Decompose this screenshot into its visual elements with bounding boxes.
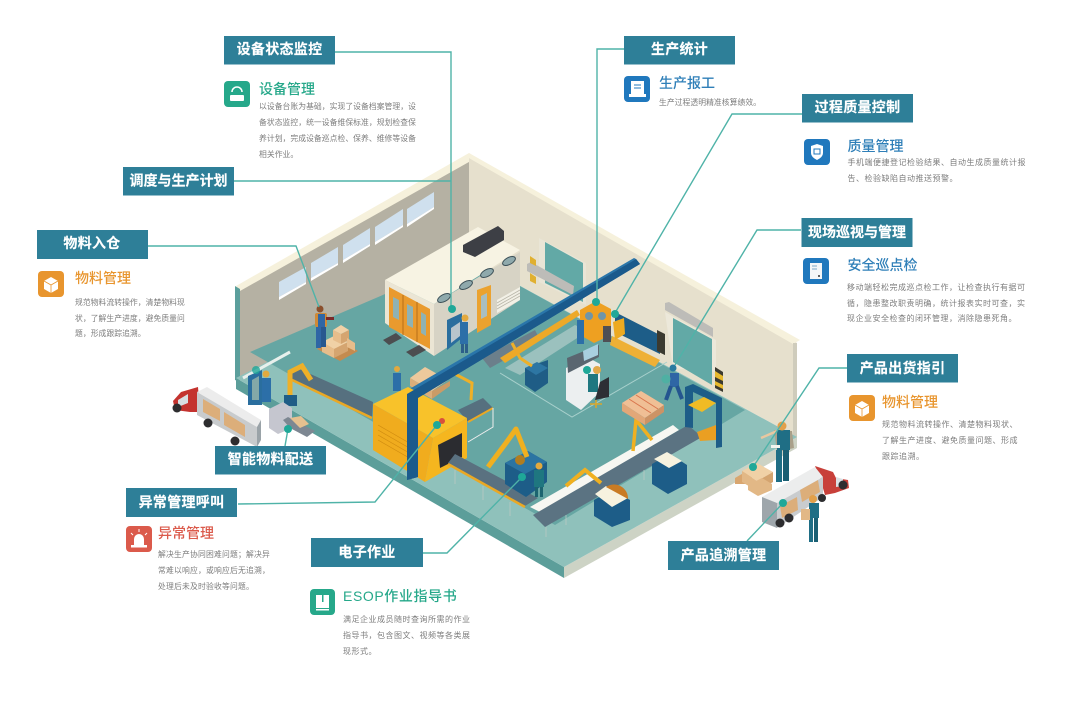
connector lines bbox=[148, 49, 847, 553]
icon: shield bbox=[804, 139, 830, 165]
heading: 产品追溯管理: 产品追溯管理 bbox=[681, 547, 766, 563]
illustration: isometric factory bbox=[172, 153, 849, 578]
truck: left bbox=[172, 387, 261, 447]
panel: 物料管理 left bbox=[38, 270, 185, 338]
material gate bbox=[269, 402, 315, 437]
heading: 过程质量控制 bbox=[802, 94, 913, 122]
heading: 生产统计 bbox=[624, 36, 735, 64]
title: 设备管理 bbox=[259, 81, 315, 97]
cartons behind gantry with worker bbox=[393, 366, 450, 399]
worker: truck loader bbox=[801, 495, 819, 542]
description: 解决生产协同困难问题；解决异 bbox=[158, 549, 270, 559]
description: 满足企业成员随时查询所需的作业 bbox=[343, 614, 470, 624]
worker: shipping supervisor bbox=[761, 422, 794, 482]
description: 处理后未及时验收等问题。 bbox=[158, 581, 254, 591]
description: 指导书，包含图文、视频等各类展 bbox=[343, 630, 470, 640]
icon: cube bbox=[38, 271, 64, 297]
title: ESOP作业指导书 bbox=[343, 588, 457, 604]
panel: ESOP作业指导书 bbox=[310, 588, 470, 656]
description: 养计划，完成设备巡点检、保养、维修等设备 bbox=[259, 133, 416, 143]
pallet of cartons bbox=[622, 391, 664, 425]
heading: 智能物料配送: 智能物料配送 bbox=[228, 451, 313, 467]
description: 告、检验缺陷自动推送预警。 bbox=[848, 173, 958, 183]
description bbox=[848, 157, 1026, 183]
heading: 调度与生产计划: 调度与生产计划 bbox=[130, 172, 228, 188]
yellow machine box bbox=[373, 259, 640, 482]
truck: right bbox=[762, 466, 849, 528]
heading: 过程质量控制: 过程质量控制 bbox=[815, 99, 900, 115]
description: 了解生产进度、避免质量问题、形成 bbox=[882, 435, 1018, 445]
icon: cube bbox=[849, 395, 875, 421]
description: 题，形成跟踪追溯。 bbox=[75, 328, 146, 338]
title: 异常管理 bbox=[158, 525, 214, 541]
icon: book bbox=[310, 589, 335, 615]
heading: 电子作业: 电子作业 bbox=[338, 544, 396, 560]
heading: 电子作业 bbox=[311, 538, 423, 567]
description bbox=[343, 614, 470, 656]
panel: 异常管理 bbox=[126, 525, 270, 591]
heading: 产品出货指引 bbox=[847, 354, 958, 382]
heading: 物料入仓: 物料入仓 bbox=[63, 235, 121, 251]
heading: 智能物料配送 bbox=[215, 446, 326, 474]
right wall bbox=[469, 153, 800, 440]
panel: 设备管理 bbox=[224, 81, 416, 159]
title: 安全巡点检 bbox=[848, 257, 918, 273]
description: 移动端轻松完成巡点检工作，让检查执行有据可 bbox=[847, 282, 1026, 292]
description: 规范物料流转操作，清楚物料现 bbox=[75, 297, 185, 307]
workstation with terminal worker bbox=[248, 370, 271, 405]
rear roll-up door bbox=[527, 238, 586, 305]
front conveyor bbox=[448, 454, 538, 516]
heading: 物料入仓 bbox=[37, 230, 148, 259]
heading: 异常管理呼叫: 异常管理呼叫 bbox=[139, 494, 224, 510]
worker: inspector bbox=[662, 364, 682, 400]
icon: alarm bbox=[126, 526, 152, 552]
description: 现企业安全检查的闭环管理，消除隐患死角。 bbox=[847, 313, 1017, 323]
description: 状，了解生产进度，避免质量问 bbox=[75, 313, 185, 323]
description: 常难以响应，或响应后无追溯， bbox=[158, 565, 270, 575]
description: 以设备台账为基础，实现了设备档案管理，设 bbox=[259, 101, 416, 111]
description bbox=[259, 101, 416, 159]
description bbox=[882, 419, 1018, 461]
title: 生产报工 bbox=[659, 75, 715, 91]
right roll-up door bbox=[657, 302, 723, 392]
heading: 生产统计: 生产统计 bbox=[651, 41, 708, 57]
icon: report bbox=[624, 76, 650, 102]
robot cell with blue cube bbox=[488, 429, 547, 497]
panel: 生产报工 bbox=[624, 75, 761, 107]
description bbox=[75, 297, 185, 338]
title: 物料管理 bbox=[75, 270, 131, 286]
heading: 现场巡视与管理 bbox=[802, 218, 912, 247]
worker: warehouse bbox=[315, 306, 334, 348]
heading: 调度与生产计划 bbox=[123, 167, 234, 196]
left conveyor with robot arms bbox=[284, 366, 493, 442]
floor slab bbox=[236, 258, 797, 578]
title: 物料管理 bbox=[882, 394, 938, 410]
description: 规范物料流转操作、清楚物料现状、 bbox=[882, 419, 1018, 429]
cartons by shipping door bbox=[735, 463, 773, 496]
description: 相关作业。 bbox=[259, 149, 298, 159]
icon: router bbox=[224, 81, 250, 107]
strapping frame bbox=[685, 384, 722, 448]
heading: 异常管理呼叫 bbox=[126, 488, 237, 517]
description: 跟踪追溯。 bbox=[882, 451, 924, 461]
description: 备状态监控，统一设备维保标准，规划检查保 bbox=[259, 117, 416, 127]
icon: checklist bbox=[803, 258, 829, 284]
gantry beam bbox=[406, 258, 640, 480]
control desk with operator bbox=[566, 344, 609, 410]
long conveyor with white strip bbox=[530, 425, 702, 537]
quality robot cell bbox=[577, 301, 665, 367]
description: 循，隐患整改职责明确，统计报表实时可查，实 bbox=[847, 298, 1026, 308]
heading: 产品追溯管理 bbox=[668, 541, 779, 570]
heading: 设备状态监控: 设备状态监控 bbox=[237, 41, 322, 57]
heading: 产品出货指引: 产品出货指引 bbox=[860, 360, 945, 376]
panel: 物料管理 right bbox=[849, 394, 1018, 461]
panel: 质量管理 bbox=[804, 138, 1026, 183]
heading: 现场巡视与管理: 现场巡视与管理 bbox=[808, 224, 906, 240]
paint booth bbox=[383, 226, 520, 357]
panel: 安全巡点检 bbox=[803, 257, 1026, 323]
pallet with cartons, left bbox=[317, 325, 358, 361]
description bbox=[847, 282, 1026, 323]
left wall bbox=[235, 153, 476, 382]
description: 手机端便捷登记检验结果、自动生成质量统计报 bbox=[848, 157, 1026, 167]
description: 现形式。 bbox=[343, 646, 377, 656]
description bbox=[158, 549, 270, 591]
description: 生产过程透明精准核算绩效。 bbox=[659, 97, 761, 107]
under-gantry conveyor bbox=[482, 325, 588, 392]
packaging station cubes bbox=[566, 420, 687, 527]
marker dots bbox=[252, 298, 787, 507]
title: 质量管理 bbox=[848, 138, 904, 154]
heading: 设备状态监控 bbox=[224, 36, 335, 64]
